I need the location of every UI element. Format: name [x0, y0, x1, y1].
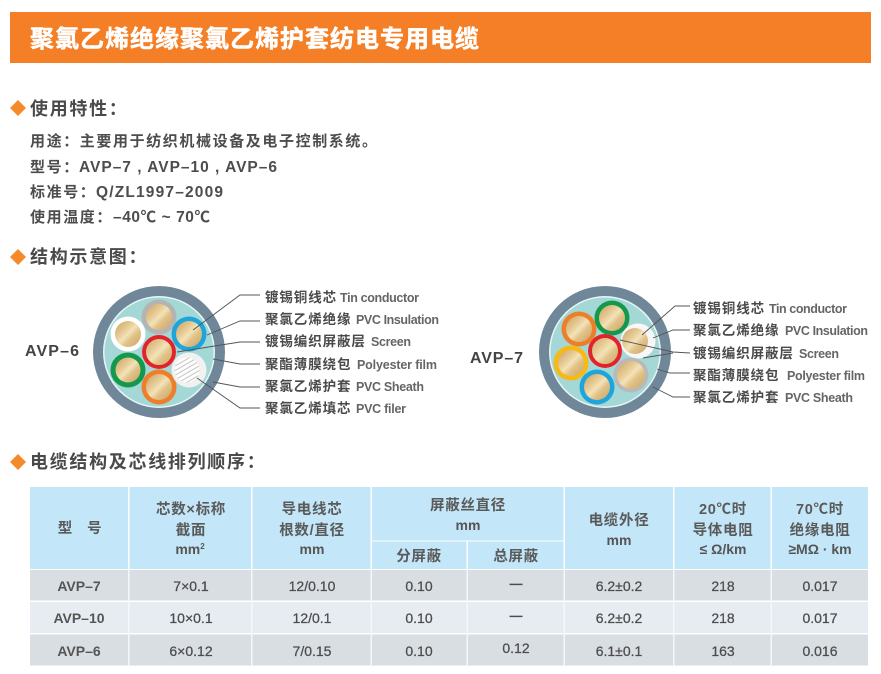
table header: mm	[300, 541, 324, 557]
table header: mm	[175, 541, 200, 557]
labels AVP-6: Polyester film	[357, 358, 437, 372]
table row: AVP-10: 一	[509, 609, 523, 625]
labels AVP-7: 聚氯乙烯绝缘	[693, 322, 779, 338]
labels AVP-7: 聚氯乙烯护套	[693, 389, 779, 405]
table header: ≤ Ω/km	[700, 541, 746, 557]
table row: AVP-10: 0.10	[405, 610, 433, 626]
table row: AVP-10: 12/0.1	[293, 610, 332, 626]
labels AVP-6: 聚酯薄膜绕包	[265, 356, 351, 372]
table header: 芯数×标称	[156, 501, 226, 518]
cable cross-section AVP-6	[93, 286, 225, 418]
labels AVP-6: 聚氯乙烯填芯	[265, 400, 351, 416]
table header: 根数/直径	[279, 521, 345, 539]
title banner	[10, 12, 871, 63]
text block: characteristics: 标准号：	[30, 184, 96, 201]
labels AVP-6: Screen	[371, 335, 411, 349]
labels AVP-6	[265, 289, 439, 416]
table header: 型 号	[58, 520, 102, 537]
table row: AVP-7	[30, 570, 868, 600]
table header: 导体电阻	[693, 522, 753, 539]
table row: AVP-7: 218	[711, 578, 735, 594]
label: AVP-7: AVP–7	[470, 350, 523, 367]
text block: characteristics	[30, 132, 379, 226]
table row: AVP-6: 163	[711, 643, 735, 659]
table row: AVP-6: 0.10	[405, 643, 433, 659]
text block: characteristics: 使用温度：	[30, 208, 113, 226]
table row: AVP-10: 218	[711, 610, 735, 626]
heading: structure diagram: 结构示意图：	[30, 246, 148, 267]
leader lines AVP-7	[620, 306, 690, 397]
table header: 绝缘电阻	[790, 521, 850, 539]
table header: 2	[200, 542, 205, 551]
title banner: 聚氯乙烯绝缘聚氯乙烯护套纺电专用电缆	[30, 25, 480, 53]
labels AVP-6: 镀锡铜线芯	[265, 289, 337, 305]
table header: 电缆外径	[589, 511, 649, 529]
table row: AVP-10: 10×0.1	[169, 610, 213, 626]
label: AVP-6: AVP–6	[25, 343, 79, 360]
text block: characteristics: 用途：主要用于纺织机械设备及电子控制系统。	[30, 132, 379, 150]
labels AVP-7: PVC Insulation	[785, 324, 868, 338]
leader lines AVP-6	[177, 295, 260, 408]
table header: 20℃时	[699, 501, 747, 518]
table row: AVP-7: 0.10	[405, 578, 433, 594]
column separators	[128, 570, 772, 666]
labels AVP-7: 镀锡铜线芯	[693, 300, 765, 316]
text block: characteristics: AVP–7 , AVP–10 , AVP–6	[79, 159, 277, 176]
table row: AVP-7: AVP–7	[57, 578, 101, 594]
heading: usage characteristics: 使用特性：	[30, 99, 128, 119]
labels AVP-7	[693, 300, 868, 405]
labels AVP-6: PVC Insulation	[356, 313, 439, 327]
table row: AVP-6: 6×0.12	[169, 643, 213, 659]
table header: 70℃时	[796, 501, 844, 518]
table header: 截面	[176, 521, 206, 539]
labels AVP-6: Tin conductor	[340, 291, 419, 305]
heading: cable structure and core order: 电缆结构及芯线排列顺序：	[30, 451, 266, 472]
text block: characteristics: –40℃ ~ 70℃	[113, 209, 210, 226]
table row: AVP-7: 一	[509, 577, 523, 593]
table: cable specifications	[30, 487, 868, 666]
table row: AVP-6	[30, 634, 868, 666]
labels AVP-6: 聚氯乙烯绝缘	[265, 311, 351, 327]
table row: AVP-10	[30, 602, 868, 633]
diagram: AVP-6 cable	[25, 286, 439, 418]
table row: AVP-6: 6.1±0.1	[596, 643, 643, 659]
labels AVP-7: 聚酯薄膜绕包	[693, 367, 779, 383]
table row: AVP-7: 6.2±0.2	[596, 578, 643, 594]
table row: AVP-7: 7×0.1	[173, 578, 209, 594]
text block: characteristics: Q/ZL1997–2009	[96, 184, 223, 201]
labels AVP-7: 镀锡编织屏蔽层	[693, 345, 794, 361]
table row: AVP-10: 6.2±0.2	[596, 610, 643, 626]
table row: AVP-6: 7/0.15	[293, 643, 332, 659]
diagram: AVP-7 cable	[470, 286, 868, 418]
table row: AVP-6: 0.12	[502, 640, 530, 656]
table header: 屏蔽丝直径	[430, 496, 506, 514]
labels AVP-6: 聚氯乙烯护套	[265, 378, 351, 394]
table header: 总屏蔽	[493, 547, 539, 565]
labels AVP-7: Tin conductor	[769, 302, 847, 316]
cable cross-section AVP-7	[539, 286, 671, 418]
table row: AVP-6: 0.016	[802, 643, 838, 659]
table header: 分屏蔽	[396, 548, 442, 565]
table header: 导电线芯	[282, 500, 342, 518]
labels AVP-6: PVC filer	[356, 402, 406, 416]
labels AVP-7: PVC Sheath	[785, 391, 853, 405]
table row: AVP-6: AVP–6	[57, 643, 101, 659]
labels AVP-7: Screen	[799, 347, 839, 361]
labels AVP-6: 镀锡编织屏蔽层	[265, 333, 366, 349]
text block: characteristics: 型号：	[30, 159, 80, 176]
table header	[30, 487, 868, 569]
labels AVP-6: PVC Sheath	[356, 380, 424, 394]
table header: ≥MΩ · km	[788, 541, 852, 557]
table header: mm	[607, 532, 631, 548]
table row: AVP-7: 0.017	[802, 578, 838, 594]
table row: AVP-7: 12/0.10	[289, 578, 336, 594]
labels AVP-7: Polyester film	[787, 369, 865, 383]
table header: mm	[456, 517, 480, 533]
table row: AVP-10: AVP–10	[53, 610, 105, 626]
table row: AVP-10: 0.017	[802, 610, 838, 626]
